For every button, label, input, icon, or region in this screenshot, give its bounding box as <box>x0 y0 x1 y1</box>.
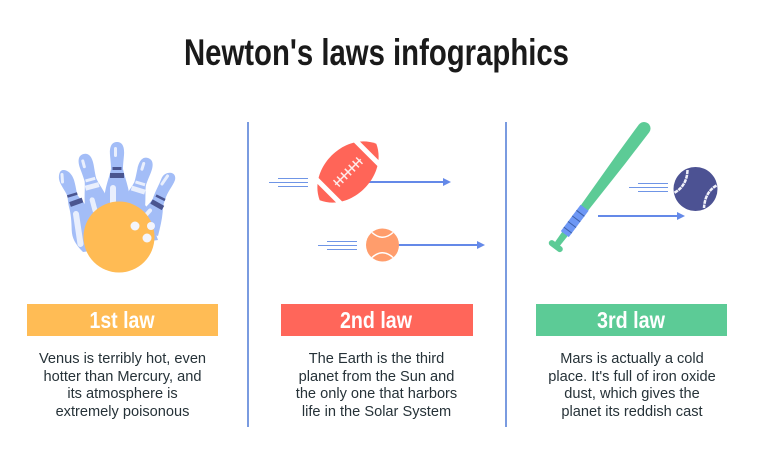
text: 1st law: Venus is terribly hot, even <box>39 351 206 367</box>
text: 1st law: extremely poisonous <box>56 404 189 420</box>
text: 2nd law: the only one that harbors <box>296 386 457 402</box>
heading bar: 1st law: 1st law <box>90 307 155 333</box>
text: 2nd law: The Earth is the third <box>309 351 444 367</box>
heading bar: 1st law <box>27 304 218 336</box>
divider: right <box>505 122 507 427</box>
icon: bowling pins and ball <box>59 142 175 272</box>
divider: left <box>247 122 249 427</box>
title: Newton's laws infographics <box>184 32 569 73</box>
panel: 2nd law <box>269 123 485 420</box>
panel: 3rd law <box>536 118 727 420</box>
icon: football with motion lines and arrow <box>269 123 451 221</box>
text: 3rd law: Mars is actually a cold <box>560 351 704 367</box>
heading bar: 3rd law <box>536 304 727 336</box>
heading bar: 2nd law: 2nd law <box>340 307 412 333</box>
heading bar: 2nd law <box>281 304 473 336</box>
text: 1st law: its atmosphere is <box>67 386 178 402</box>
text: 1st law: hotter than Mercury, and <box>44 369 201 385</box>
text: 3rd law: planet its reddish cast <box>561 404 703 420</box>
text: 3rd law: dust, which gives the <box>564 386 700 402</box>
heading bar: 3rd law: 3rd law <box>597 307 665 333</box>
text: 2nd law: life in the Solar System <box>302 404 451 420</box>
panel: 1st law <box>27 142 218 420</box>
icon: baseball bat <box>548 118 654 253</box>
icon: baseball with motion lines and arrow <box>598 167 718 220</box>
text: 3rd law: place. It's full of iron oxide <box>548 369 716 385</box>
icon: tennis ball with motion lines and arrow <box>318 228 485 262</box>
text: 2nd law: planet from the Sun and <box>299 369 454 385</box>
